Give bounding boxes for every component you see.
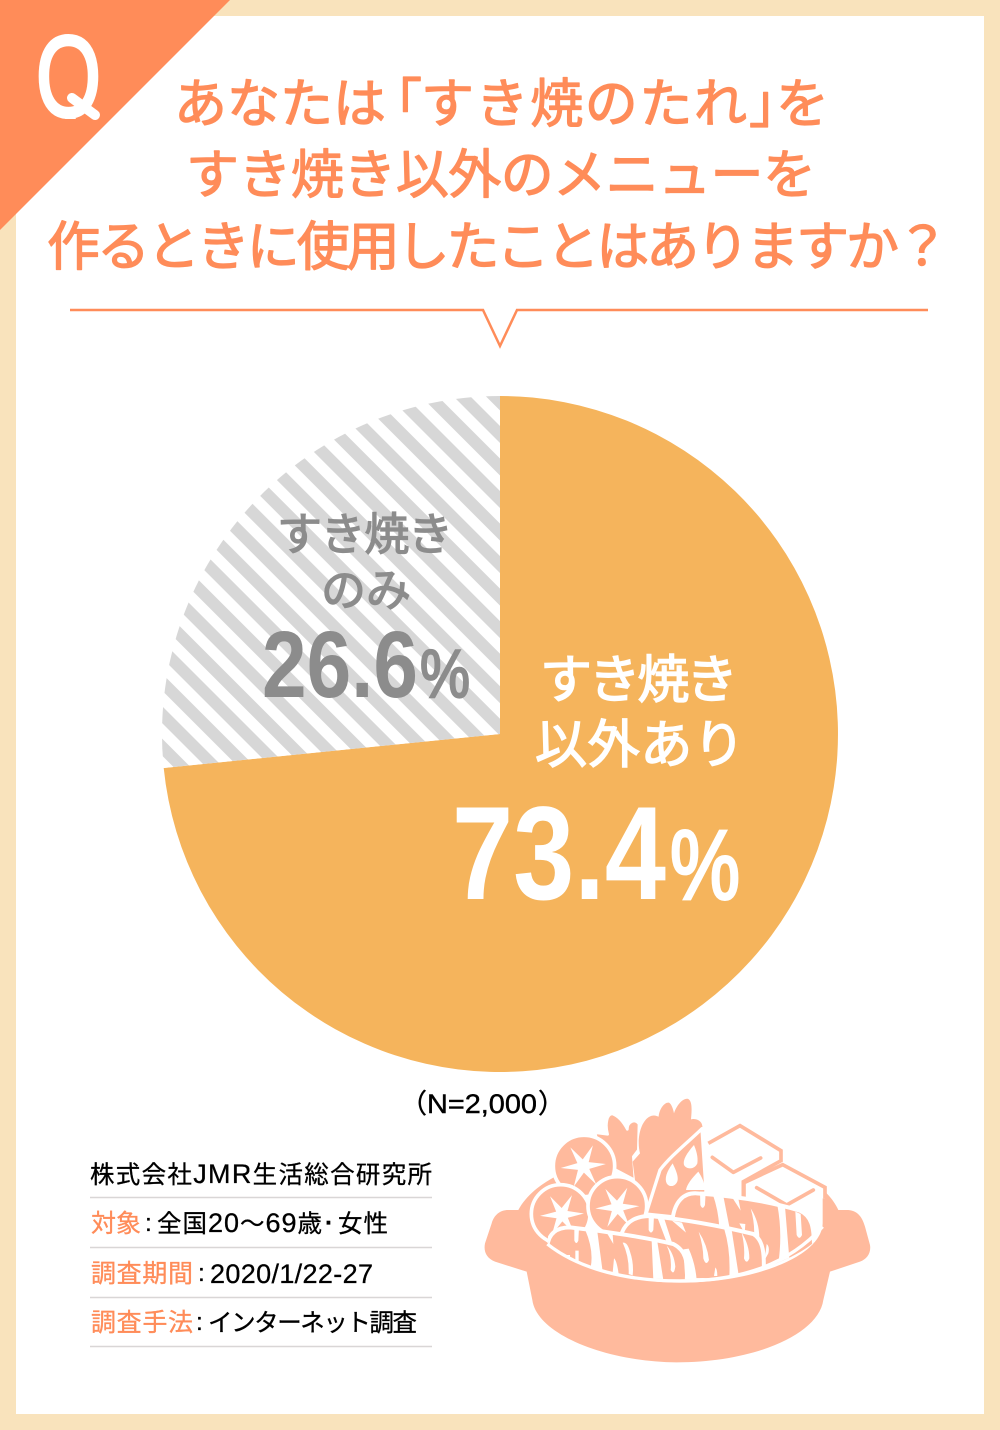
pot rim <box>547 1227 823 1281</box>
pie slice: other uses 73.4% <box>164 396 838 1072</box>
tofu back <box>708 1126 781 1200</box>
company name: 株式会社JMR生活総合研究所 <box>90 1159 432 1189</box>
bowl interior <box>533 1180 823 1283</box>
sample size <box>400 1089 565 1119</box>
tofu front <box>744 1165 825 1200</box>
title: すき焼き以外のメニューを <box>186 146 816 205</box>
title: を <box>776 75 829 134</box>
survey period: 調査期間 <box>91 1260 193 1288</box>
pot body <box>485 1177 870 1362</box>
leaves <box>595 1114 639 1180</box>
survey method: 調査手法 <box>91 1309 193 1337</box>
survey period: : <box>198 1260 205 1287</box>
middle piece <box>620 1215 769 1280</box>
title: すき焼のたれ <box>421 75 747 134</box>
label: sukiyaki only <box>262 509 470 718</box>
tofu back crease <box>712 1157 761 1172</box>
back piece <box>671 1191 815 1264</box>
survey method <box>91 1309 417 1337</box>
title <box>47 75 949 277</box>
title: あなたは <box>174 75 386 134</box>
corner Q badge <box>0 0 230 230</box>
survey method: インターネット調査 <box>208 1309 417 1337</box>
pie slice: sukiyaki only 26.6% <box>162 396 500 768</box>
title: 「 <box>369 75 422 134</box>
bamboo shoot <box>646 1129 706 1220</box>
survey method: : <box>196 1309 203 1336</box>
front piece <box>547 1227 697 1282</box>
tofu front crease <box>757 1188 813 1205</box>
survey target <box>91 1208 388 1238</box>
sample size: N=2,000 <box>427 1089 537 1119</box>
title: 」 <box>749 75 802 134</box>
corner Q badge: Q <box>36 13 101 141</box>
label: other uses <box>452 652 745 928</box>
label: sukiyaki only: のみ <box>321 565 411 616</box>
survey target: · <box>325 1210 333 1237</box>
survey period <box>91 1259 373 1289</box>
label: sukiyaki only: 26.6 <box>262 612 418 718</box>
survey target: 全国20～69歳 <box>157 1208 322 1238</box>
icon: sukiyaki hot pot <box>485 1099 870 1362</box>
label: other uses: すき焼き <box>540 652 738 710</box>
label: other uses: % <box>670 810 740 920</box>
survey target: : <box>145 1210 152 1237</box>
long vegetables <box>547 1192 814 1282</box>
survey target: 対象 <box>91 1210 141 1238</box>
label: other uses: 以外あり <box>535 717 745 775</box>
sample size: ） <box>538 1089 565 1119</box>
survey period: 2020/1/22-27 <box>210 1259 373 1289</box>
survey information <box>90 1159 432 1346</box>
label: sukiyaki only: % <box>420 636 470 712</box>
label: other uses: 73.4 <box>452 780 666 928</box>
pie chart <box>162 396 838 1072</box>
label: sukiyaki only: すき焼き <box>277 509 453 560</box>
title divider with pointer <box>70 310 928 346</box>
tomatoes <box>531 1135 647 1243</box>
sample size: （ <box>400 1089 427 1119</box>
survey target: 女性 <box>338 1210 388 1238</box>
title: 作るときに使用したことはありますか？ <box>47 218 949 277</box>
